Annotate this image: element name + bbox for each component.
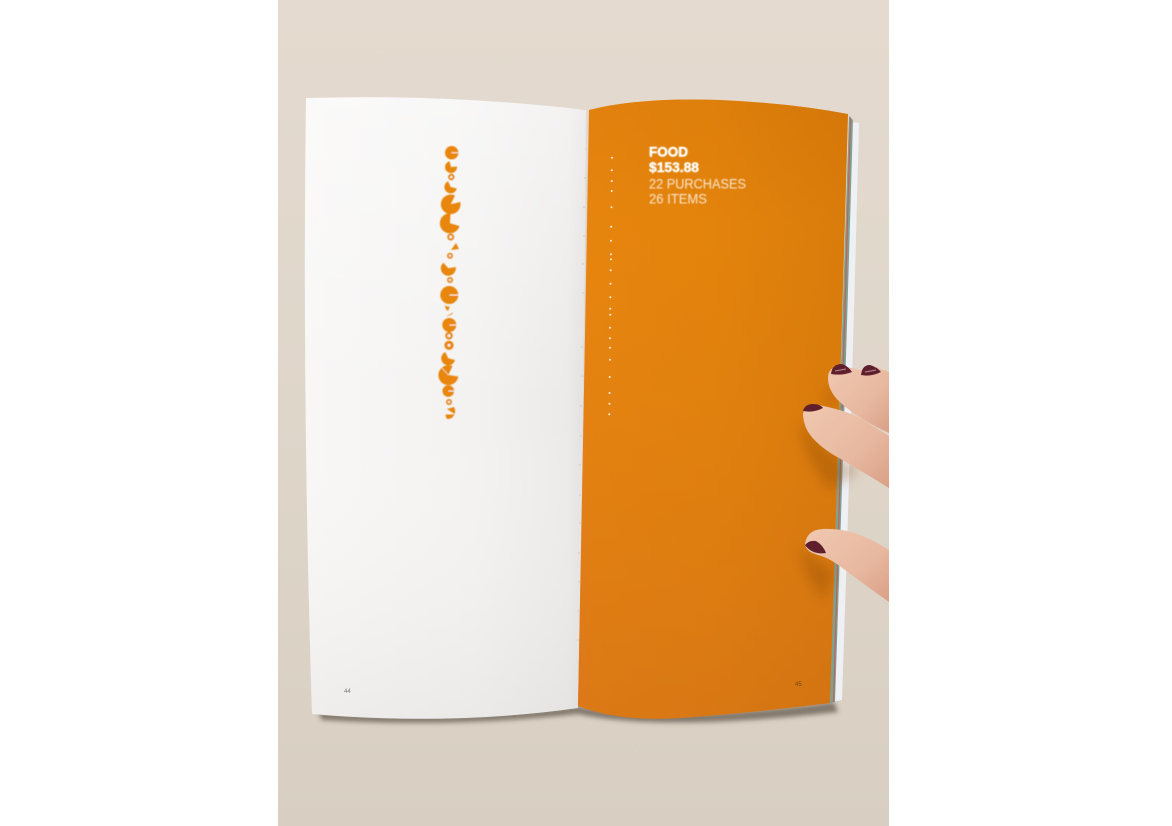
sliver 14 xyxy=(446,312,453,316)
pie 4 xyxy=(444,181,457,193)
ring 3 xyxy=(448,174,454,180)
back pages edge xyxy=(830,116,859,703)
nail 1 xyxy=(831,364,852,375)
book shadow xyxy=(318,702,838,723)
pie 1 xyxy=(445,146,458,159)
pie 5 xyxy=(441,194,460,214)
nail 4 xyxy=(805,541,826,553)
spine stitch holes xyxy=(577,148,587,641)
ring 21 xyxy=(446,399,452,405)
pie 19 xyxy=(438,365,458,385)
finger 1 xyxy=(828,366,889,433)
pie 18 xyxy=(441,352,455,365)
pie 10 xyxy=(441,263,456,276)
page number 44: 44 xyxy=(344,689,351,695)
nail 3 xyxy=(803,404,823,412)
hand xyxy=(803,364,889,602)
purchase dots xyxy=(608,157,613,415)
items count: 26 ITEMS xyxy=(649,192,707,206)
finger shadows xyxy=(800,380,860,600)
title: food: FOOD xyxy=(649,144,688,160)
right page xyxy=(578,99,848,719)
ring 7 xyxy=(447,234,454,240)
purchases count: 22 PURCHASES xyxy=(649,176,746,192)
finger 2 xyxy=(803,405,889,488)
ring 17 xyxy=(444,341,454,350)
ring 16 xyxy=(445,332,453,340)
wedge 13 xyxy=(445,305,450,311)
page number 45: 45 xyxy=(795,682,802,688)
heading text block xyxy=(649,144,746,206)
pie 22 xyxy=(446,407,455,419)
pie 6 xyxy=(440,213,460,233)
left page xyxy=(305,97,586,719)
ring 9 xyxy=(447,253,453,259)
ring 11 xyxy=(447,277,453,283)
pie 2 xyxy=(445,161,457,173)
back finger xyxy=(860,367,889,400)
nail 2 xyxy=(861,365,881,376)
wedge 8 xyxy=(451,243,459,250)
finger 3 xyxy=(805,529,889,602)
pie 20 xyxy=(442,385,454,397)
background surface xyxy=(278,0,889,826)
pie 15 xyxy=(442,318,456,332)
total amount: $153.88 xyxy=(649,160,699,175)
pie 12 xyxy=(440,286,458,304)
pie chart column xyxy=(438,146,460,419)
